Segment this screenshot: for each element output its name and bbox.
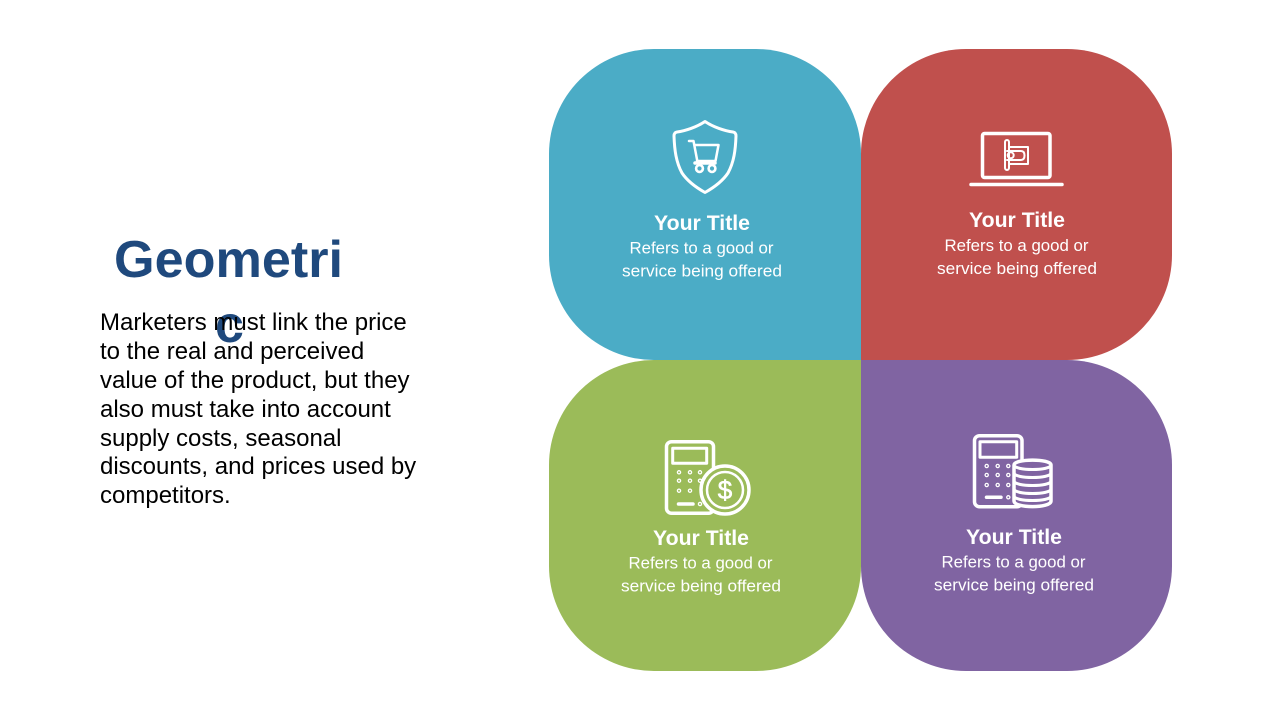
heading: teal: Your Title xyxy=(654,212,750,235)
text: red: Refers to a good or xyxy=(944,237,1089,255)
text: red: service being offered xyxy=(937,260,1097,278)
panel: red xyxy=(861,49,1172,360)
panel: purple xyxy=(861,360,1172,671)
panel: green xyxy=(549,360,861,671)
body text block: supply costs, seasonal xyxy=(100,425,341,452)
body text block: also must take into account xyxy=(100,396,391,423)
heading: green: Your Title xyxy=(653,527,749,550)
body text block: value of the product, but they xyxy=(100,367,410,394)
body text block xyxy=(100,309,416,509)
text: teal: Refers to a good or xyxy=(630,239,774,257)
icon: shield with cart xyxy=(674,122,736,192)
body text block: competitors. xyxy=(100,482,231,509)
panel: teal xyxy=(549,49,861,360)
text: red xyxy=(937,237,1097,278)
text: purple xyxy=(934,553,1094,594)
heading: purple: Your Title xyxy=(966,526,1062,549)
body text block: discounts, and prices used by xyxy=(100,453,416,480)
title: Geometri xyxy=(114,231,343,289)
icon: calculator with coin: $ xyxy=(718,475,733,505)
text: green: Refers to a good or xyxy=(628,554,773,572)
text: teal: service being offered xyxy=(622,262,782,280)
title xyxy=(114,231,343,354)
icon: calculator with coin xyxy=(666,442,749,514)
text: teal xyxy=(622,239,782,280)
icon: calculator with coin stack xyxy=(974,436,1051,507)
heading: red: Your Title xyxy=(969,209,1065,232)
title: c xyxy=(215,296,244,354)
body text block: Marketers must link the price xyxy=(100,309,407,336)
text: green: service being offered xyxy=(621,577,781,595)
icon: laptop with card xyxy=(971,134,1062,184)
text: purple: Refers to a good or xyxy=(942,553,1086,571)
text: purple: service being offered xyxy=(934,576,1094,594)
body text block: to the real and perceived xyxy=(100,338,364,365)
text: green xyxy=(621,554,781,595)
